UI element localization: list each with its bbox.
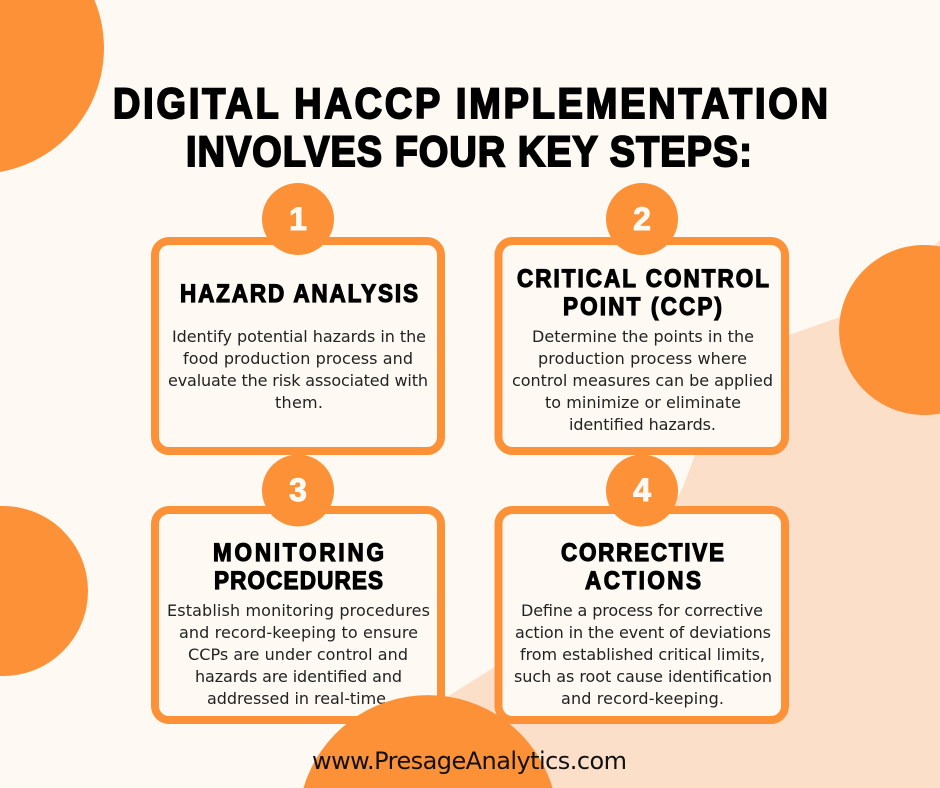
text: step 3 description: [167, 601, 430, 708]
text: step 2 description: production process where: [538, 349, 747, 368]
text: step 1 description: [168, 327, 428, 412]
text: step 4 description: Define a process for corrective: [521, 601, 763, 620]
text: step 1 description: evaluate the risk associated with: [168, 371, 428, 390]
panel: step 3 monitoring procedures: [155, 454, 441, 720]
footer website: www.PresageAnalytics.com: [312, 747, 627, 775]
text: step 2 description: control measures can be applied: [512, 371, 773, 390]
text: step 2 description: Determine the points in the: [532, 327, 754, 346]
badge: number 3: 3: [289, 472, 307, 508]
background peach shape: [380, 240, 940, 788]
heading: hazard analysis: HAZARD ANALYSIS: [180, 280, 418, 308]
badge: number 1: [262, 183, 334, 255]
text: step 4 description: such as root cause identification: [514, 667, 772, 686]
text: step 2 description: to minimize or eliminate: [545, 393, 741, 412]
text: step 4 description: [514, 601, 772, 708]
title: [113, 79, 828, 176]
heading: critical control point: POINT (CCP): [563, 293, 722, 321]
text: step 1 description: Identify potential hazards in the: [172, 327, 426, 346]
badge: number 3: [262, 454, 334, 526]
panel: step 1 hazard analysis: [155, 183, 441, 451]
text: step 1 description: them.: [275, 393, 323, 412]
text: step 3 description: hazards are identified and: [195, 667, 402, 686]
heading: monitoring procedures: PROCEDURES: [214, 567, 383, 595]
decorative circle: top left: [0, 0, 104, 172]
badge: number 2: [606, 183, 678, 255]
heading: monitoring procedures: [213, 539, 384, 595]
text: step 4 description: action in the event of deviations: [515, 623, 771, 642]
text: step 2 description: [512, 327, 773, 434]
panel: step 2 critical control point: [498, 183, 785, 451]
text: step 3 description: and record-keeping to ensure: [179, 623, 418, 642]
text: step 3 description: CCPs are under control and: [188, 645, 408, 664]
heading: critical control point: CRITICAL CONTROL: [517, 265, 769, 293]
text: step 3 description: Establish monitoring procedures: [167, 601, 430, 620]
heading: monitoring procedures: MONITORING: [213, 539, 384, 567]
badge: number 2: 2: [633, 201, 651, 237]
badge: number 4: 4: [633, 472, 651, 508]
heading: corrective actions: ACTIONS: [585, 567, 701, 595]
decorative circle: bottom centre: [303, 695, 553, 788]
badge: number 1: 1: [289, 201, 307, 237]
text: step 4 description: and record-keeping.: [561, 689, 724, 708]
text: step 4 description: from established critical limits,: [520, 645, 765, 664]
text: step 3 description: addressed in real-time.: [207, 689, 391, 708]
heading: critical control point: [517, 265, 769, 321]
title: INVOLVES FOUR KEY STEPS:: [186, 127, 752, 176]
heading: corrective actions: CORRECTIVE: [561, 539, 724, 567]
title: DIGITAL HACCP IMPLEMENTATION: [113, 79, 828, 128]
text: step 2 description: identified hazards.: [569, 415, 716, 434]
badge: number 4: [606, 454, 678, 526]
decorative circle: right: [839, 245, 940, 415]
decorative circle: left: [0, 506, 88, 676]
panel: step 4 corrective actions: [498, 454, 785, 720]
heading: corrective actions: [561, 539, 724, 595]
text: step 1 description: food production process and: [183, 349, 413, 368]
